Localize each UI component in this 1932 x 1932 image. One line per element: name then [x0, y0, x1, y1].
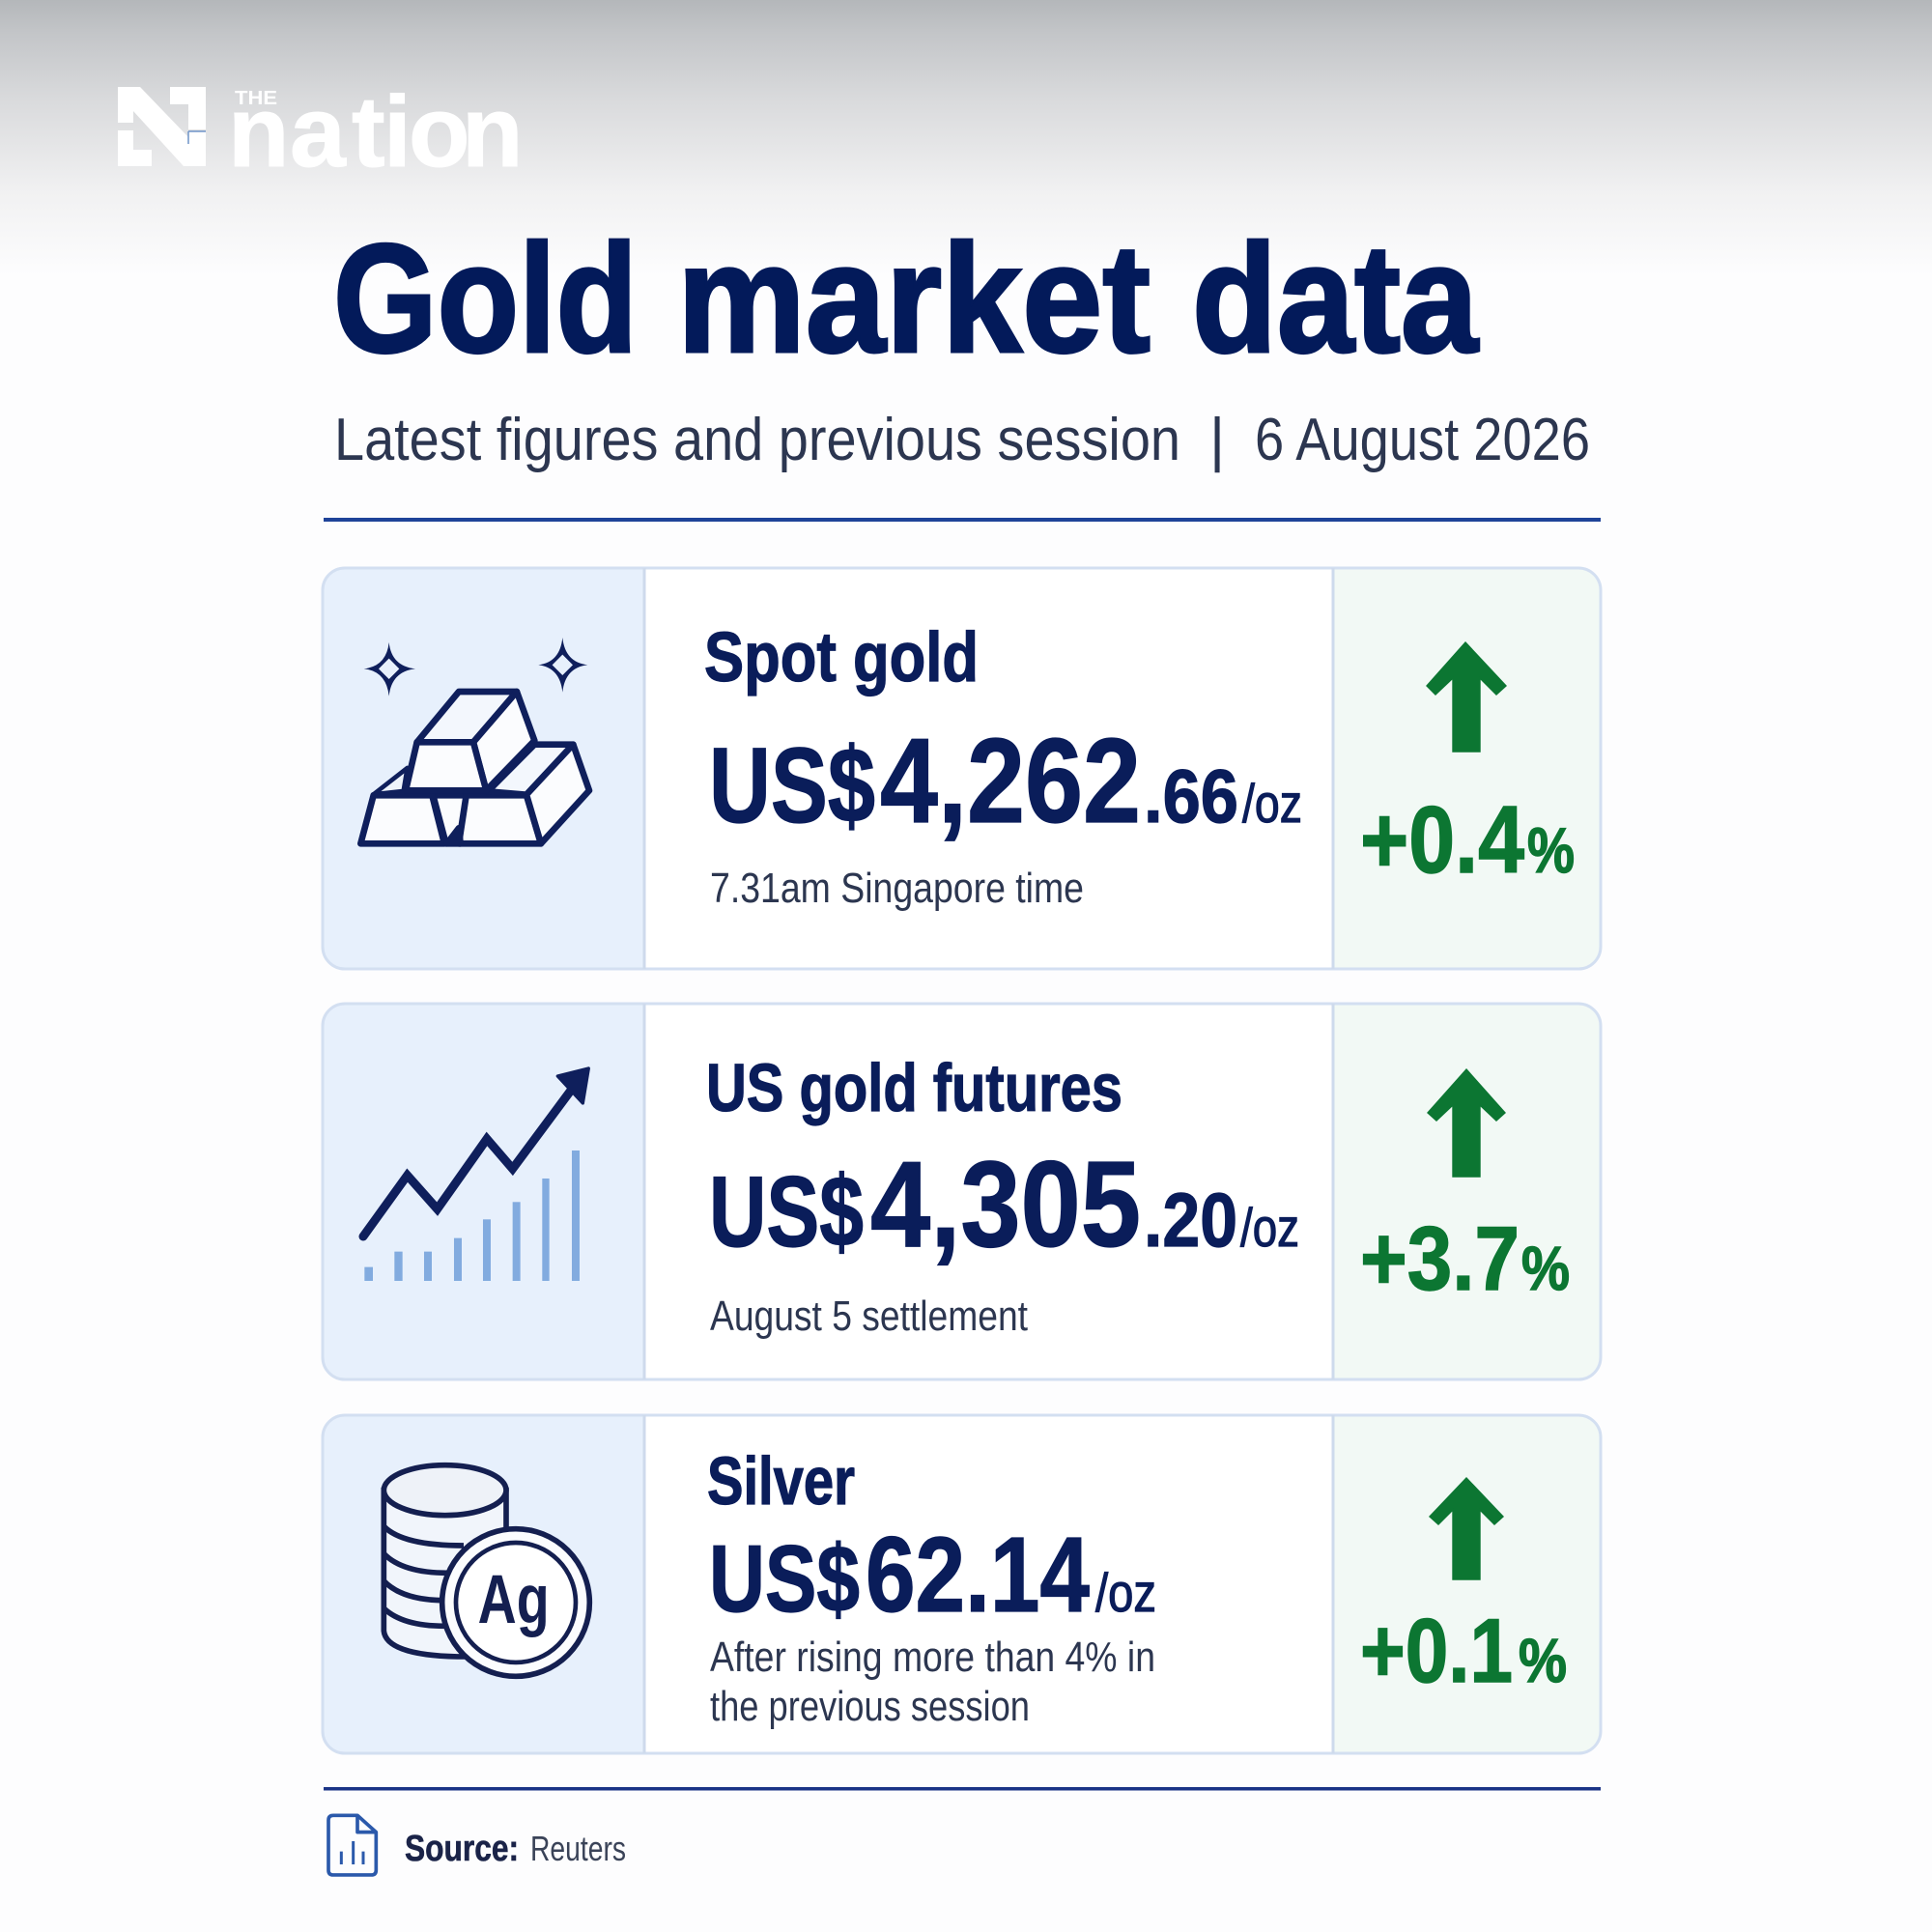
subtitle: |	[1209, 407, 1225, 473]
price: US gold futures: /oz	[1240, 1197, 1299, 1258]
change: +0.4%: +0.4	[1360, 786, 1524, 893]
logo: The Nation: nation	[228, 76, 524, 188]
price: spot gold: US$	[709, 726, 875, 845]
label: US gold futures: US gold futures	[706, 1050, 1122, 1125]
source line: Reuters	[530, 1829, 626, 1868]
icon: rising chart	[363, 1068, 588, 1281]
price: US gold futures: US$	[709, 1156, 864, 1268]
source line: Source:	[405, 1829, 519, 1869]
note: silver previous session: the previous session	[710, 1683, 1030, 1730]
panel: silver	[323, 1415, 1601, 1753]
note: settlement: August 5 settlement	[710, 1293, 1028, 1340]
title: data	[1192, 212, 1479, 384]
panel: US gold futures	[323, 1004, 1601, 1379]
panel: spot gold	[323, 568, 1601, 969]
icon: gold bars	[360, 638, 589, 843]
subtitle: Latest figures and previous session	[334, 407, 1180, 473]
icon: silver coins	[384, 1465, 589, 1676]
arrow: up	[1430, 1478, 1503, 1579]
change: +0.1%: %	[1519, 1626, 1567, 1695]
price: US gold futures: .20	[1144, 1177, 1237, 1263]
title: market	[677, 212, 1151, 384]
price: silver: 62.14	[866, 1516, 1090, 1634]
label: spot gold: Spot gold	[704, 619, 979, 696]
note: silver previous session	[710, 1634, 1155, 1730]
source line	[405, 1829, 626, 1869]
note: spot gold time: 7.31am Singapore time	[710, 865, 1084, 912]
change: +0.1%: +0.1	[1360, 1600, 1513, 1701]
price: US gold futures	[709, 1136, 1299, 1272]
price: silver: /oz	[1095, 1562, 1156, 1623]
price: silver: US$	[709, 1525, 860, 1632]
icon: source document	[328, 1815, 376, 1875]
price: US gold futures: 4,305	[870, 1136, 1141, 1272]
price: spot gold: 4,262	[880, 715, 1141, 848]
price: spot gold: .66	[1144, 753, 1238, 838]
arrow: up	[1428, 1069, 1505, 1177]
price: spot gold: /oz	[1242, 773, 1302, 834]
icon: silver coins: Ag	[478, 1561, 550, 1638]
change: +3.7%: %	[1521, 1234, 1570, 1303]
change: +3.7%: +3.7	[1360, 1208, 1520, 1309]
label: silver: Silver	[707, 1443, 855, 1519]
logo: The Nation: THE	[235, 88, 277, 109]
price: silver	[709, 1516, 1156, 1634]
change: +0.4%: %	[1527, 814, 1575, 886]
arrow: up	[1427, 642, 1506, 752]
title: Gold	[333, 212, 638, 384]
price: spot gold	[709, 715, 1302, 848]
title	[333, 212, 1479, 384]
note: silver previous session: After rising more than 4% in	[710, 1634, 1155, 1681]
subtitle: 6 August 2026	[1255, 407, 1590, 473]
